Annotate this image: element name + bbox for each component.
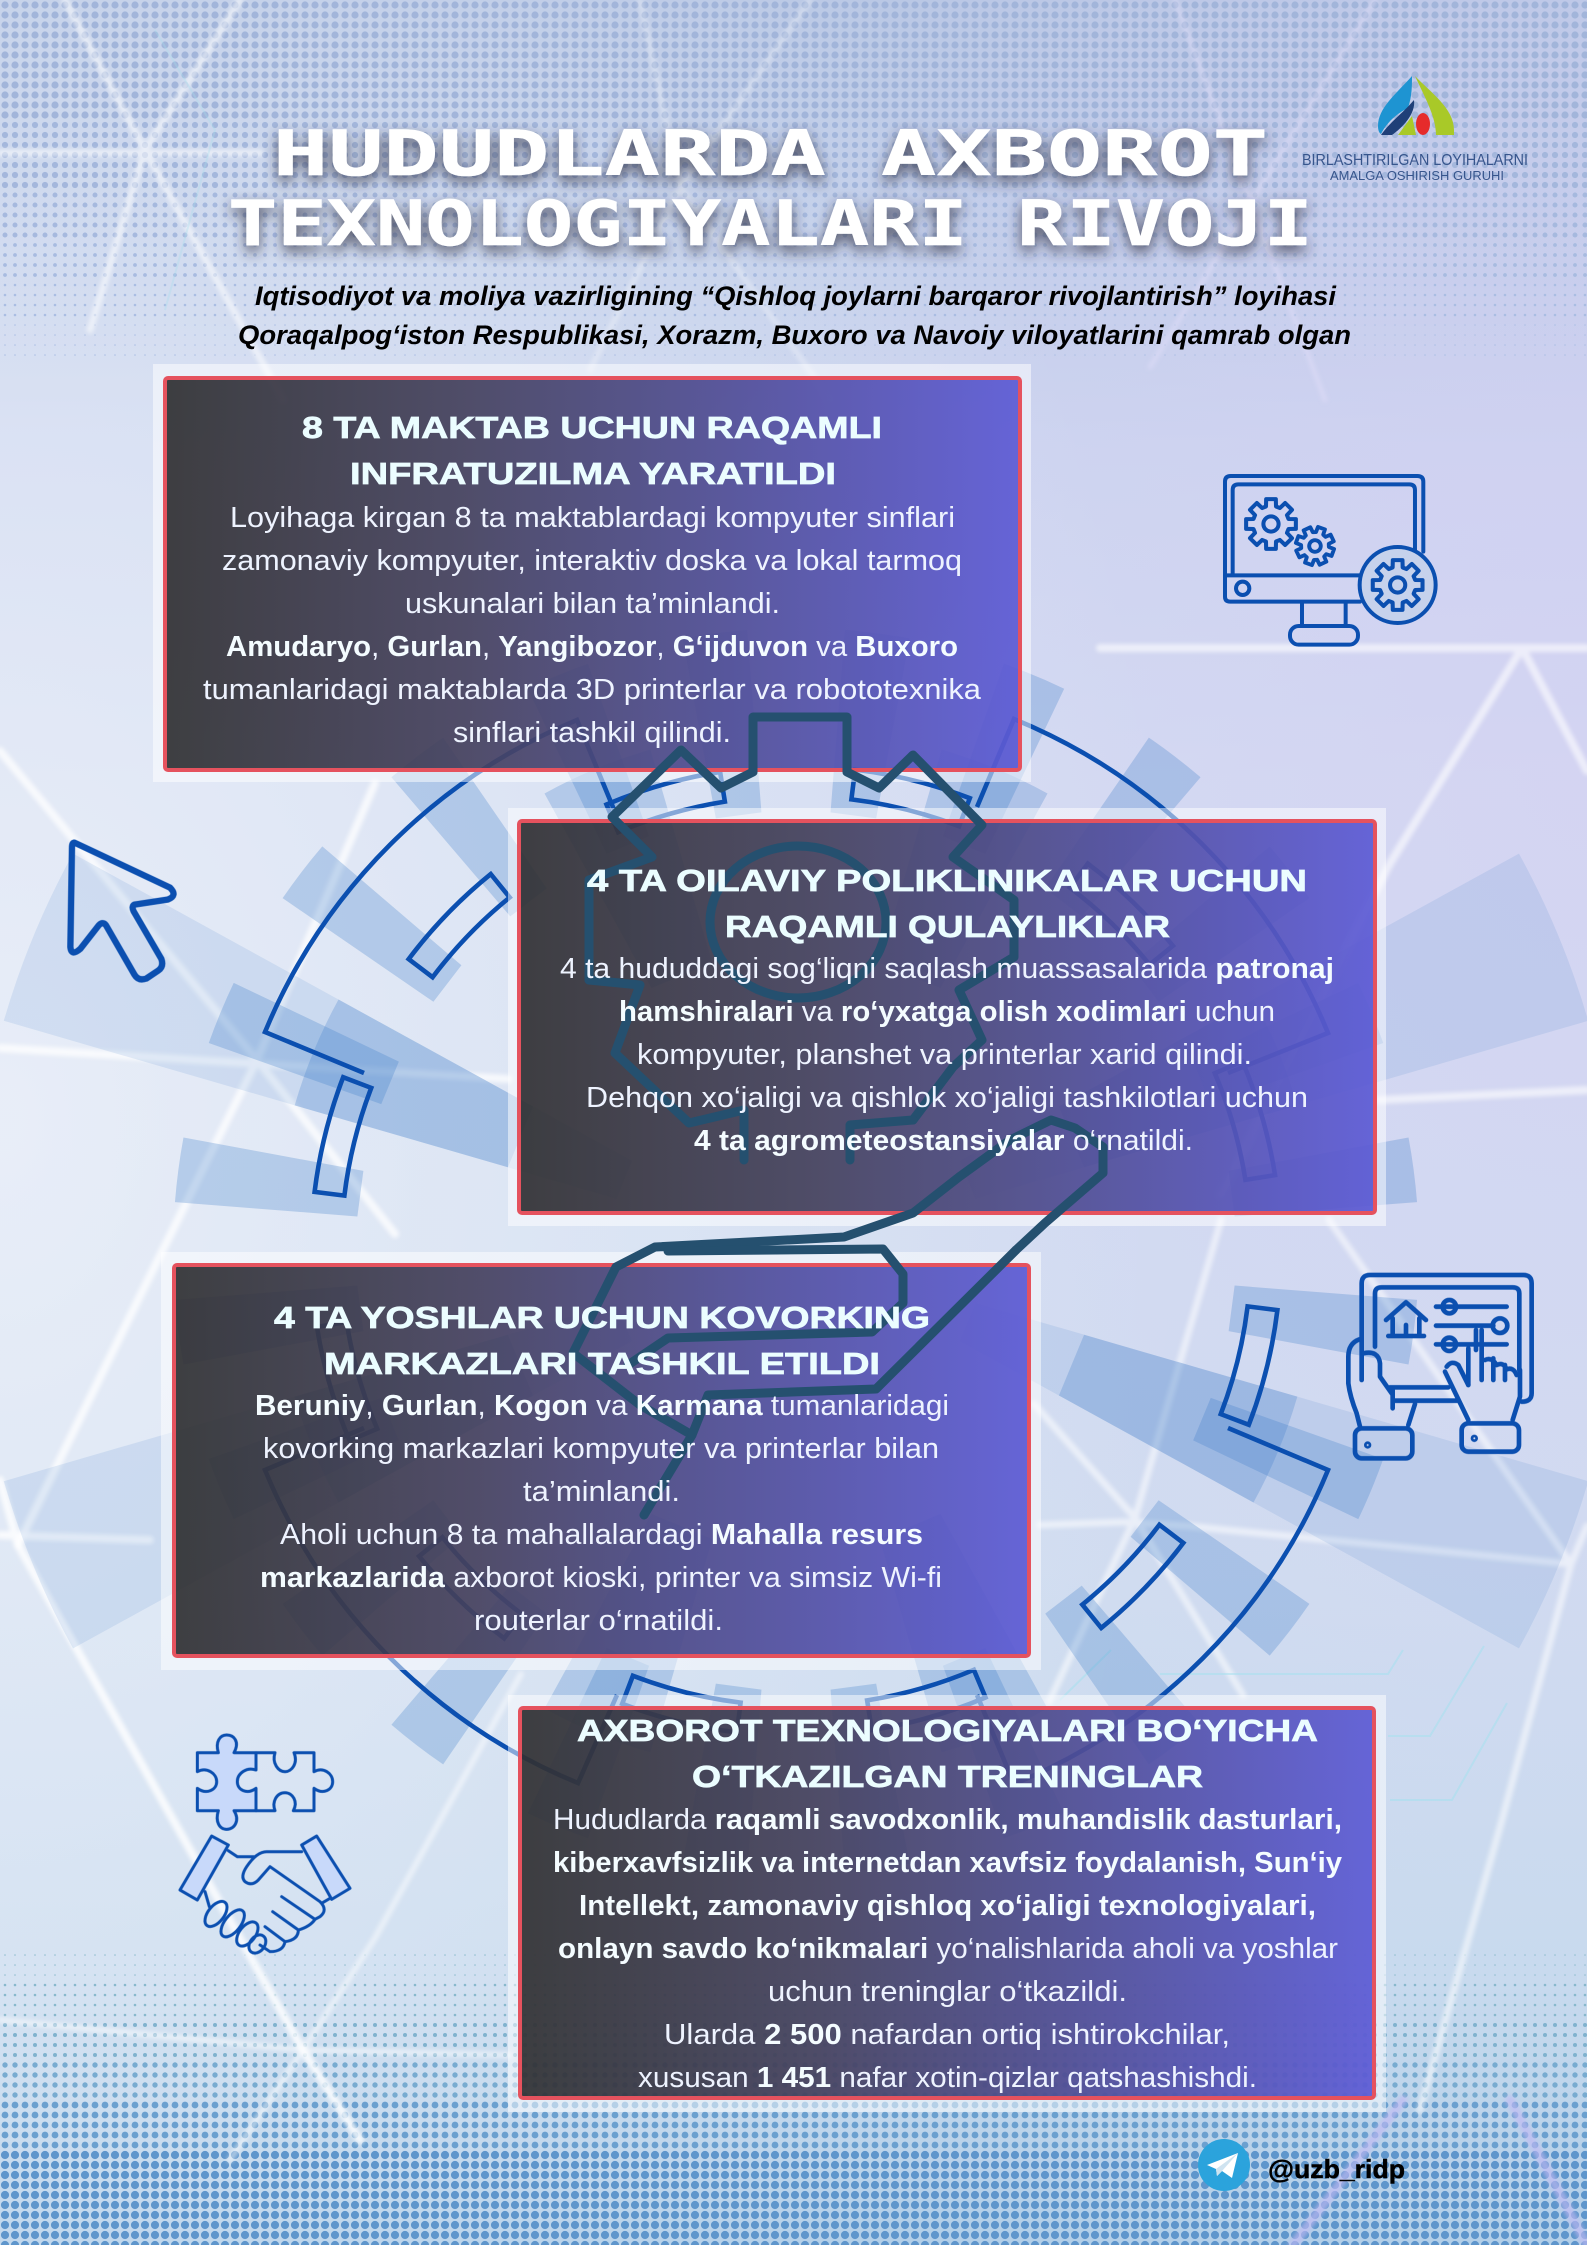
text: coworking: kovorking markazlari kompyuter va printerlar bilan	[263, 1433, 939, 1465]
text: schools	[203, 410, 982, 749]
logo: AMALGA OSHIRISH GURUHI	[1330, 168, 1504, 183]
text: schools: tumanlaridagi maktablarda 3D printerlar va robototexnika	[203, 674, 982, 706]
text: coworking: 4 TA YOSHLAR UCHUN KOVORKING	[274, 1300, 930, 1335]
telegram handle: @uzb_ridp	[1268, 2154, 1405, 2184]
subtitle	[238, 281, 1351, 350]
panel: coworking	[161, 1252, 1041, 1670]
text: polyclinics: RAQAMLI QULAYLIKLAR	[725, 909, 1170, 944]
text: coworking: MARKAZLARI TASHKIL ETILDI	[324, 1346, 880, 1381]
text: polyclinics: 4 TA OILAVIY POLIKLINIKALAR UCHUN	[587, 863, 1307, 898]
text: coworking: ta’minlandi.	[523, 1476, 680, 1508]
text: polyclinics: 4 ta hududdagi sog‘liqni saqlash muassasalarida patronaj	[560, 953, 1334, 985]
panel: schools	[153, 364, 1031, 782]
gear outer ring arcs	[265, 719, 1328, 1784]
title: TEXNOLOGIYALARI RIVOJI	[228, 187, 1313, 260]
text: trainings: kiberxavfsizlik va internetdan xavfsiz foydalanish, Sun‘iy	[553, 1847, 1342, 1879]
text: polyclinics: 4 ta agrometeostansiyalar o‘rnatildi.	[694, 1125, 1193, 1157]
subtitle: Qoraqalpog‘iston Respublikasi, Xorazm, Buxoro va Navoiy viloyatlarini qamrab olgan	[238, 320, 1351, 350]
text: trainings	[553, 1713, 1342, 2094]
panel: polyclinics	[508, 808, 1386, 1226]
text: trainings: onlayn savdo ko‘nikmalari yo‘nalishlarida aholi va yoshlar	[558, 1933, 1338, 1965]
text: polyclinics: Dehqon xo‘jaligi va qishlok xo‘jaligi tashkilotlari uchun	[586, 1082, 1308, 1114]
logo: BIRLASHTIRILGAN LOYIHALARNI	[1302, 152, 1528, 169]
panel: trainings	[508, 1695, 1386, 2112]
subtitle: Iqtisodiyot va moliya vazirligining “Qishloq joylarni barqaror rivojlantirish” loyihasi	[255, 281, 1336, 311]
text: trainings: uchun treninglar o‘tkazildi.	[768, 1976, 1127, 2008]
icon: puzzle and handshake	[180, 1735, 350, 1956]
text: polyclinics: hamshiralari va ro‘yxatga olish xodimlari uchun	[619, 996, 1275, 1028]
icon: cursor arrow	[70, 843, 174, 979]
text: schools: Amudaryo, Gurlan, Yangibozor, G‘ijduvon va Buxoro	[226, 631, 958, 663]
text: coworking: routerlar o‘rnatildi.	[474, 1605, 723, 1637]
title	[228, 117, 1313, 260]
text: trainings: O‘TKAZILGAN TRENINGLAR	[692, 1759, 1203, 1794]
text: coworking: markazlarida axborot kioski, printer va simsiz Wi-fi	[260, 1562, 942, 1594]
text: trainings: Intellekt, zamonaviy qishloq xo‘jaligi texnologiyalari,	[579, 1890, 1316, 1922]
text: schools: INFRATUZILMA YARATILDI	[350, 456, 836, 491]
text: schools: uskunalari bilan ta’minlandi.	[405, 588, 780, 620]
text: schools: 8 TA MAKTAB UCHUN RAQAMLI	[302, 410, 882, 445]
text: trainings: Ularda 2 500 nafardan ortiq ishtirokchilar,	[664, 2019, 1230, 2051]
text: schools: zamonaviy kompyuter, interaktiv doska va lokal tarmoq	[222, 545, 962, 577]
text: trainings: xususan 1 451 nafar xotin-qizlar qatshashishdi.	[638, 2062, 1257, 2094]
text: polyclinics	[560, 863, 1334, 1157]
icon: computer with gears	[1225, 476, 1436, 645]
sunburst blocks behind gear	[0, 629, 1587, 1873]
text: schools: Loyihaga kirgan 8 ta maktablardagi kompyuter sinflari	[230, 502, 955, 534]
text: coworking	[255, 1300, 949, 1637]
text: trainings: AXBOROT TEXNOLOGIYALARI BO‘YICHA	[577, 1713, 1318, 1748]
text: coworking: Aholi uchun 8 ta mahallalardagi Mahalla resurs	[280, 1519, 923, 1551]
icon: telegram	[1198, 2139, 1250, 2191]
logo	[1302, 76, 1528, 183]
text: coworking: Beruniy, Gurlan, Kogon va Karmana tumanlaridagi	[255, 1390, 949, 1422]
icon: gear and hand outline	[573, 717, 1103, 1515]
text: schools: sinflari tashkil qilindi.	[453, 717, 731, 749]
icon: tablet with hands	[1348, 1275, 1532, 1458]
text: trainings: Hududlarda raqamli savodxonlik, muhandislik dasturlari,	[553, 1804, 1342, 1836]
text: polyclinics: kompyuter, planshet va printerlar xarid qilindi.	[637, 1039, 1252, 1071]
title: HUDUDLARDA AXBOROT	[273, 117, 1268, 190]
